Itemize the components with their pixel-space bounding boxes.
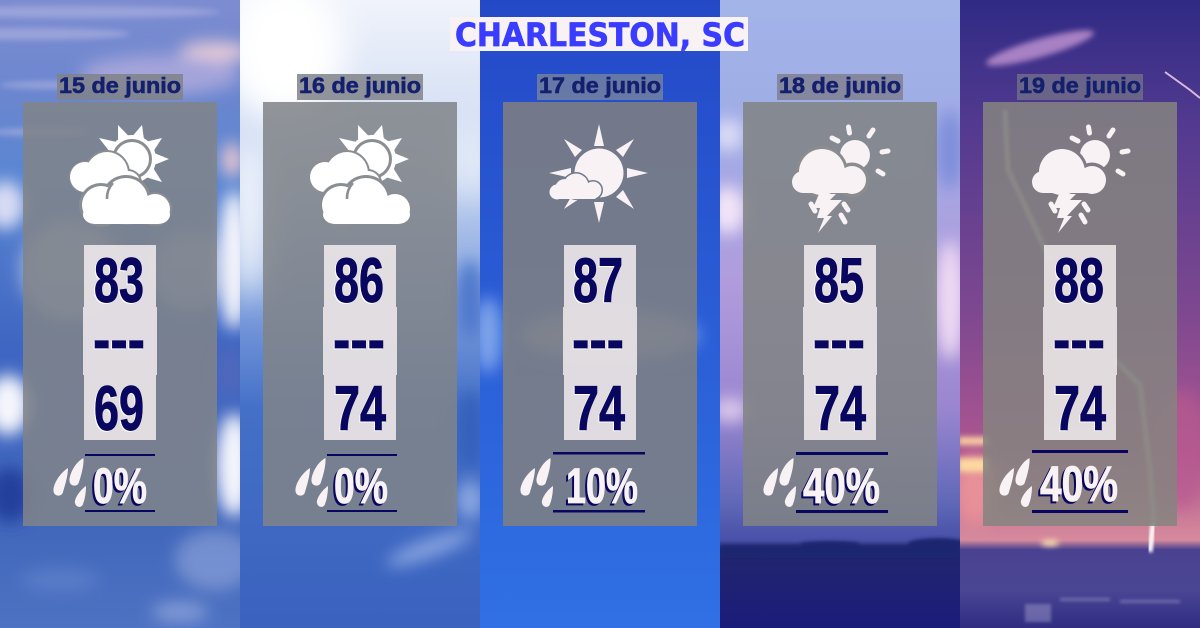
background: column 3 sky	[474, 0, 720, 628]
icon: rain drops	[999, 458, 1032, 507]
temperature block: ---	[333, 306, 385, 373]
icon: sun behind clouds	[69, 125, 172, 227]
precipitation: 40%	[803, 458, 880, 514]
icon: sun behind clouds	[309, 125, 412, 227]
icon: rain drops	[763, 458, 796, 507]
date label: 15 de junio	[59, 73, 181, 98]
panel: 16 de junio	[263, 73, 457, 526]
date label: 19 de junio	[1019, 73, 1141, 98]
temperature block: ---	[1053, 306, 1105, 373]
temperature block	[1043, 245, 1117, 444]
card background	[23, 102, 217, 526]
temperature block: 74	[1054, 374, 1106, 444]
temperature block: 87	[573, 246, 623, 316]
temperature block	[323, 245, 397, 444]
precipitation: 0%	[334, 458, 388, 514]
icon: rain drops	[53, 458, 86, 507]
temperature block: 88	[1054, 246, 1104, 316]
precipitation: 0%	[93, 458, 147, 514]
temperature block: ---	[813, 306, 865, 373]
icon: rain drops	[520, 458, 553, 507]
precipitation: 40%	[1040, 456, 1118, 512]
temperature block: ---	[93, 306, 145, 373]
temperature block: 83	[94, 246, 144, 316]
background: column 2 sky	[225, 0, 490, 628]
panel: 15 de junio	[23, 73, 217, 526]
temperature block: 86	[334, 246, 384, 316]
panel: 19 de junio	[983, 73, 1177, 526]
background: column 1 sky	[0, 0, 255, 628]
icon: rain drops	[295, 458, 328, 507]
precipitation	[553, 452, 645, 514]
card background	[503, 102, 697, 526]
panel: 18 de junio	[743, 73, 937, 526]
temperature block: 69	[94, 374, 144, 444]
precipitation: 10%	[566, 458, 638, 514]
date label: 18 de junio	[779, 73, 901, 98]
icon: thunderstorm with sun	[1032, 127, 1128, 233]
temperature block	[803, 245, 877, 444]
temperature block: 74	[814, 374, 866, 444]
title: CHARLESTON, SC	[455, 16, 745, 54]
panel: 17 de junio	[503, 73, 697, 526]
temperature block: 74	[334, 374, 386, 444]
temperature block: ---	[572, 306, 624, 373]
temperature block	[83, 245, 157, 444]
icon: sun with small cloud	[549, 124, 648, 223]
icon: thunderstorm with sun	[792, 127, 888, 233]
date label: 16 de junio	[299, 73, 421, 98]
background: column 4 stormy sky	[710, 0, 968, 628]
card background	[983, 102, 1177, 526]
background: column 5 lightning sky	[953, 0, 1200, 628]
date label: 17 de junio	[539, 73, 661, 98]
temperature block: 85	[814, 246, 864, 316]
temperature block	[563, 245, 637, 444]
temperature block: 74	[573, 374, 625, 444]
card background	[743, 102, 937, 526]
card background	[263, 102, 457, 526]
